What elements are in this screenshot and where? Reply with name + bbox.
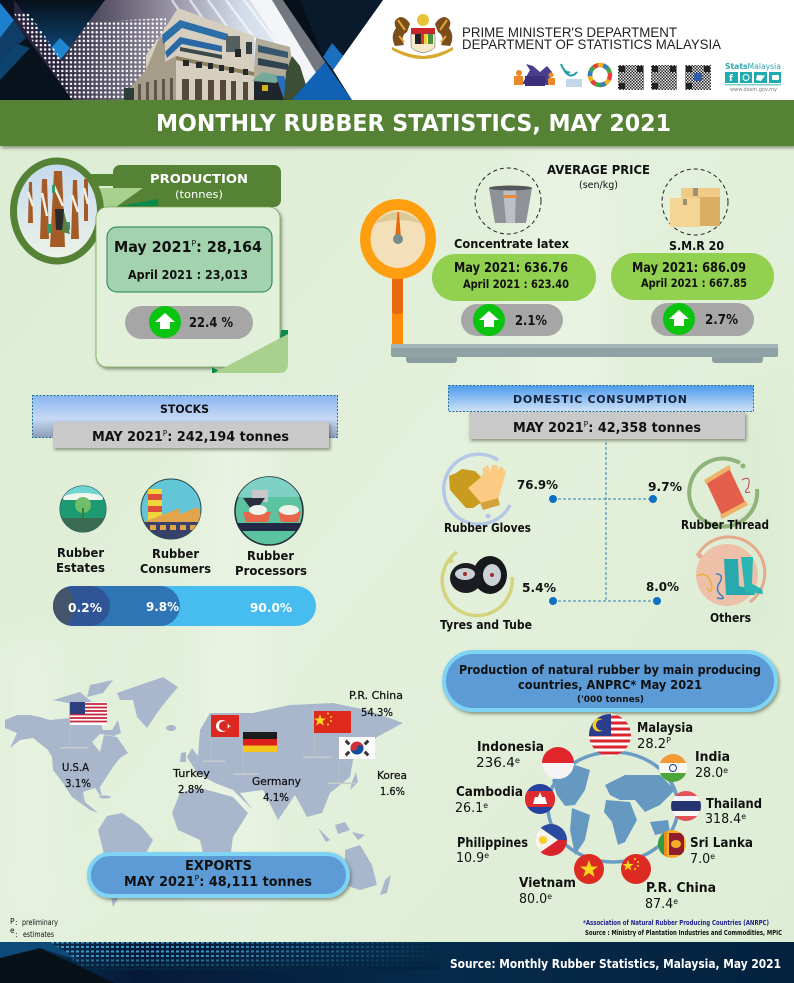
export destination labels: 3.1% xyxy=(65,777,91,790)
flag: Sri Lanka xyxy=(658,830,686,858)
may and april figures: April 2021 : 23,013 xyxy=(128,268,248,282)
stocks heading bar xyxy=(32,396,338,438)
average price heading: (sen/kg) xyxy=(579,180,618,191)
footnote legend: P xyxy=(10,917,15,926)
average price heading xyxy=(547,163,650,191)
footnote legend: : xyxy=(15,930,18,939)
production heading tab xyxy=(90,165,281,218)
S.M.R change pill xyxy=(651,303,754,336)
consumption percentages and labels: Rubber Gloves xyxy=(444,521,531,535)
flag: China round xyxy=(621,854,651,884)
building xyxy=(124,8,308,100)
stock category labels: Rubber xyxy=(57,546,104,560)
producing countries heading pill: Production of natural rubber by main producing xyxy=(459,662,761,677)
production change pill xyxy=(125,306,253,339)
S.M.R prices pill xyxy=(611,253,774,300)
country production labels: P.R. China xyxy=(646,881,716,896)
crest of Malaysia xyxy=(392,14,453,59)
latex change pill xyxy=(461,304,563,336)
domestic consumption heading bar xyxy=(448,386,754,412)
flag: Indonesia xyxy=(542,747,574,779)
flag: Malaysia xyxy=(589,714,631,756)
domestic consumption heading bar: DOMESTIC CONSUMPTION xyxy=(513,393,687,406)
country production labels: 87.4 xyxy=(645,897,674,912)
icon: rubber processors xyxy=(235,477,303,545)
country production labels: Thailand xyxy=(706,797,762,812)
flag: Cambodia xyxy=(525,784,555,814)
latex prices pill xyxy=(432,254,596,301)
campaign logos and QR codes xyxy=(514,64,711,90)
icon: rubber gloves xyxy=(444,454,510,524)
export destination labels: 1.6% xyxy=(380,785,405,798)
country production labels: e xyxy=(710,852,715,861)
department name: DEPARTMENT OF STATISTICS MALAYSIA xyxy=(462,36,722,52)
footnote legend: preliminary xyxy=(22,918,58,927)
stock category labels: Rubber xyxy=(152,547,199,561)
exports callout pill: EXPORTS xyxy=(185,858,252,874)
country production labels: 7.0 xyxy=(690,852,711,867)
flag: USA xyxy=(60,702,107,748)
country production labels: 26.1 xyxy=(455,801,484,816)
export destination labels: 2.8% xyxy=(178,783,204,796)
title banner xyxy=(0,100,794,146)
consumption percentages and labels: Rubber Thread xyxy=(681,518,769,532)
country production labels: P xyxy=(666,736,671,745)
consumption total: P xyxy=(584,420,588,429)
country production labels: 28.0 xyxy=(695,766,724,781)
footnote legend: estimates xyxy=(23,930,54,939)
department name xyxy=(462,24,722,52)
concentrate latex column: Concentrate latex xyxy=(454,237,569,251)
stock category labels: Estates xyxy=(56,561,105,575)
icon: rubber consumers xyxy=(141,479,205,542)
flag: Korea xyxy=(328,737,375,784)
may and april figures: P xyxy=(192,239,196,248)
producing countries heading pill: countries, ANPRC* May 2021 xyxy=(518,677,702,692)
country production labels: Sri Lanka xyxy=(690,836,753,851)
flag: Germany xyxy=(233,732,277,775)
stocks heading bar: STOCKS xyxy=(160,402,209,416)
may and april figures: May 2021 xyxy=(114,238,195,256)
S.M.R prices pill: May 2021: 686.09 xyxy=(632,261,746,276)
flag: India xyxy=(659,754,687,782)
icon: others xyxy=(696,537,765,606)
production heading tab: (tonnes) xyxy=(175,188,223,201)
country production labels: 28.2 xyxy=(637,737,666,752)
export destination labels: 54.3% xyxy=(361,706,393,719)
stocks total: MAY 2021 xyxy=(92,429,167,445)
consumption percentages and labels xyxy=(440,477,769,632)
flag: Turkey xyxy=(203,715,239,762)
country production labels: e xyxy=(723,766,728,775)
consumption total xyxy=(469,412,745,439)
production change pill: 22.4 % xyxy=(189,316,233,331)
production heading tab: PRODUCTION xyxy=(150,171,248,186)
footnote legend: e xyxy=(10,926,15,935)
panel: production xyxy=(14,161,288,373)
export destination labels: Korea xyxy=(377,769,407,782)
stock category labels: Rubber xyxy=(247,549,294,563)
footer band xyxy=(0,942,794,983)
S.M.R change pill: 2.7% xyxy=(705,313,738,328)
exports callout pill: MAY 2021 xyxy=(124,874,199,890)
connector lines xyxy=(549,442,661,605)
latex prices pill: May 2021: 636.76 xyxy=(454,261,568,276)
may and april figures xyxy=(107,227,272,292)
S.M.R 20 column: S.M.R 20 xyxy=(669,238,724,253)
icon: rubber estates xyxy=(60,486,106,532)
header banner with building photograph xyxy=(0,0,794,100)
stocks share bar: 9.8% xyxy=(146,599,179,614)
country production labels: Malaysia xyxy=(637,721,693,736)
S.M.R 20 column xyxy=(611,169,774,336)
panel: production by producing countries xyxy=(444,652,782,937)
country production labels: Indonesia xyxy=(477,740,544,755)
consumption percentages and labels: 9.7% xyxy=(648,479,682,494)
consumption total: MAY 2021 xyxy=(513,420,588,436)
consumption percentages and labels: 8.0% xyxy=(646,579,679,594)
consumption percentages and labels: Tyres and Tube xyxy=(440,618,532,632)
card corner fold xyxy=(212,330,288,373)
flag: China xyxy=(303,711,351,758)
country production labels: 80.0 xyxy=(519,892,548,907)
stock category labels: Processors xyxy=(235,564,307,578)
world map of exports xyxy=(5,677,403,907)
export destination labels xyxy=(62,689,407,804)
stock category labels: Consumers xyxy=(140,562,211,576)
stocks total: P xyxy=(163,429,167,438)
consumption percentages and labels: 76.9% xyxy=(517,477,558,492)
country production labels: e xyxy=(515,756,520,765)
globe xyxy=(548,752,678,862)
country production labels: 318.4 xyxy=(705,812,742,827)
exports callout pill: : 48,111 tonnes xyxy=(199,874,312,890)
flag: Thailand xyxy=(671,791,701,821)
country production labels: India xyxy=(695,750,730,765)
country production labels: Philippines xyxy=(457,836,528,851)
country production labels: e xyxy=(483,801,488,810)
export destination labels: Turkey xyxy=(172,767,210,780)
producing countries heading pill: ('000 tonnes) xyxy=(577,695,644,705)
latex prices pill: April 2021 : 623.40 xyxy=(463,277,569,291)
StatsMalaysia social block: www.dosm.gov.my xyxy=(730,87,778,93)
export destination labels: U.S.A xyxy=(62,761,89,774)
footnote legend xyxy=(10,917,58,939)
country production labels: e xyxy=(484,851,489,860)
stocks share bar: 0.2% xyxy=(68,600,102,615)
export destination labels: 4.1% xyxy=(263,791,289,804)
stock category labels xyxy=(56,546,307,578)
icon: boxes xyxy=(662,169,728,235)
concentrate latex column xyxy=(432,168,596,336)
country production labels: e xyxy=(741,812,746,821)
country production labels: e xyxy=(547,892,552,901)
footnote legend: : xyxy=(15,918,18,927)
icon: rubber trees xyxy=(14,161,100,261)
consumption percentages and labels: Others xyxy=(710,611,751,625)
department name: PRIME MINISTER'S DEPARTMENT xyxy=(462,24,677,40)
production card xyxy=(96,207,288,373)
stocks total: : 242,194 tonnes xyxy=(167,429,289,445)
stocks total xyxy=(53,422,329,448)
StatsMalaysia social block: f xyxy=(729,74,733,84)
icon: rubber thread xyxy=(689,459,757,527)
flag: Vietnam xyxy=(574,854,604,884)
ANRPC source notes xyxy=(583,919,782,937)
latex change pill: 2.1% xyxy=(515,314,547,329)
panel: stocks xyxy=(32,396,338,626)
panel: domestic consumption xyxy=(440,386,769,632)
country production labels: Vietnam xyxy=(519,876,576,891)
title banner: MONTHLY RUBBER STATISTICS, MAY 2021 xyxy=(156,109,671,137)
country production labels: 10.9 xyxy=(456,851,485,866)
StatsMalaysia social block: StatsMalaysia xyxy=(725,62,781,71)
S.M.R prices pill: April 2021 : 667.85 xyxy=(641,276,747,290)
scale illustration xyxy=(360,199,778,363)
stocks share bar xyxy=(40,586,316,626)
panel: average price xyxy=(360,163,778,363)
export destination labels: Germany xyxy=(252,775,301,788)
consumption total: : 42,358 tonnes xyxy=(588,420,701,436)
exports callout pill: P xyxy=(195,874,199,883)
may and april figures: : 28,164 xyxy=(196,238,262,256)
country production labels: Cambodia xyxy=(456,785,523,800)
country production labels: e xyxy=(673,897,678,906)
stocks share bar: 90.0% xyxy=(250,600,292,615)
exports callout pill xyxy=(89,854,348,896)
country production labels xyxy=(455,721,762,912)
producing countries heading pill xyxy=(444,652,776,710)
export destination labels: P.R. China xyxy=(349,689,403,702)
icon: bucket xyxy=(475,168,541,234)
consumption percentages and labels: 5.4% xyxy=(522,580,556,595)
country production labels: 236.4 xyxy=(476,756,513,771)
StatsMalaysia social block xyxy=(725,62,781,93)
average price heading: AVERAGE PRICE xyxy=(547,163,650,177)
icon: tyres xyxy=(442,552,512,616)
flag: Philippines xyxy=(535,824,567,856)
